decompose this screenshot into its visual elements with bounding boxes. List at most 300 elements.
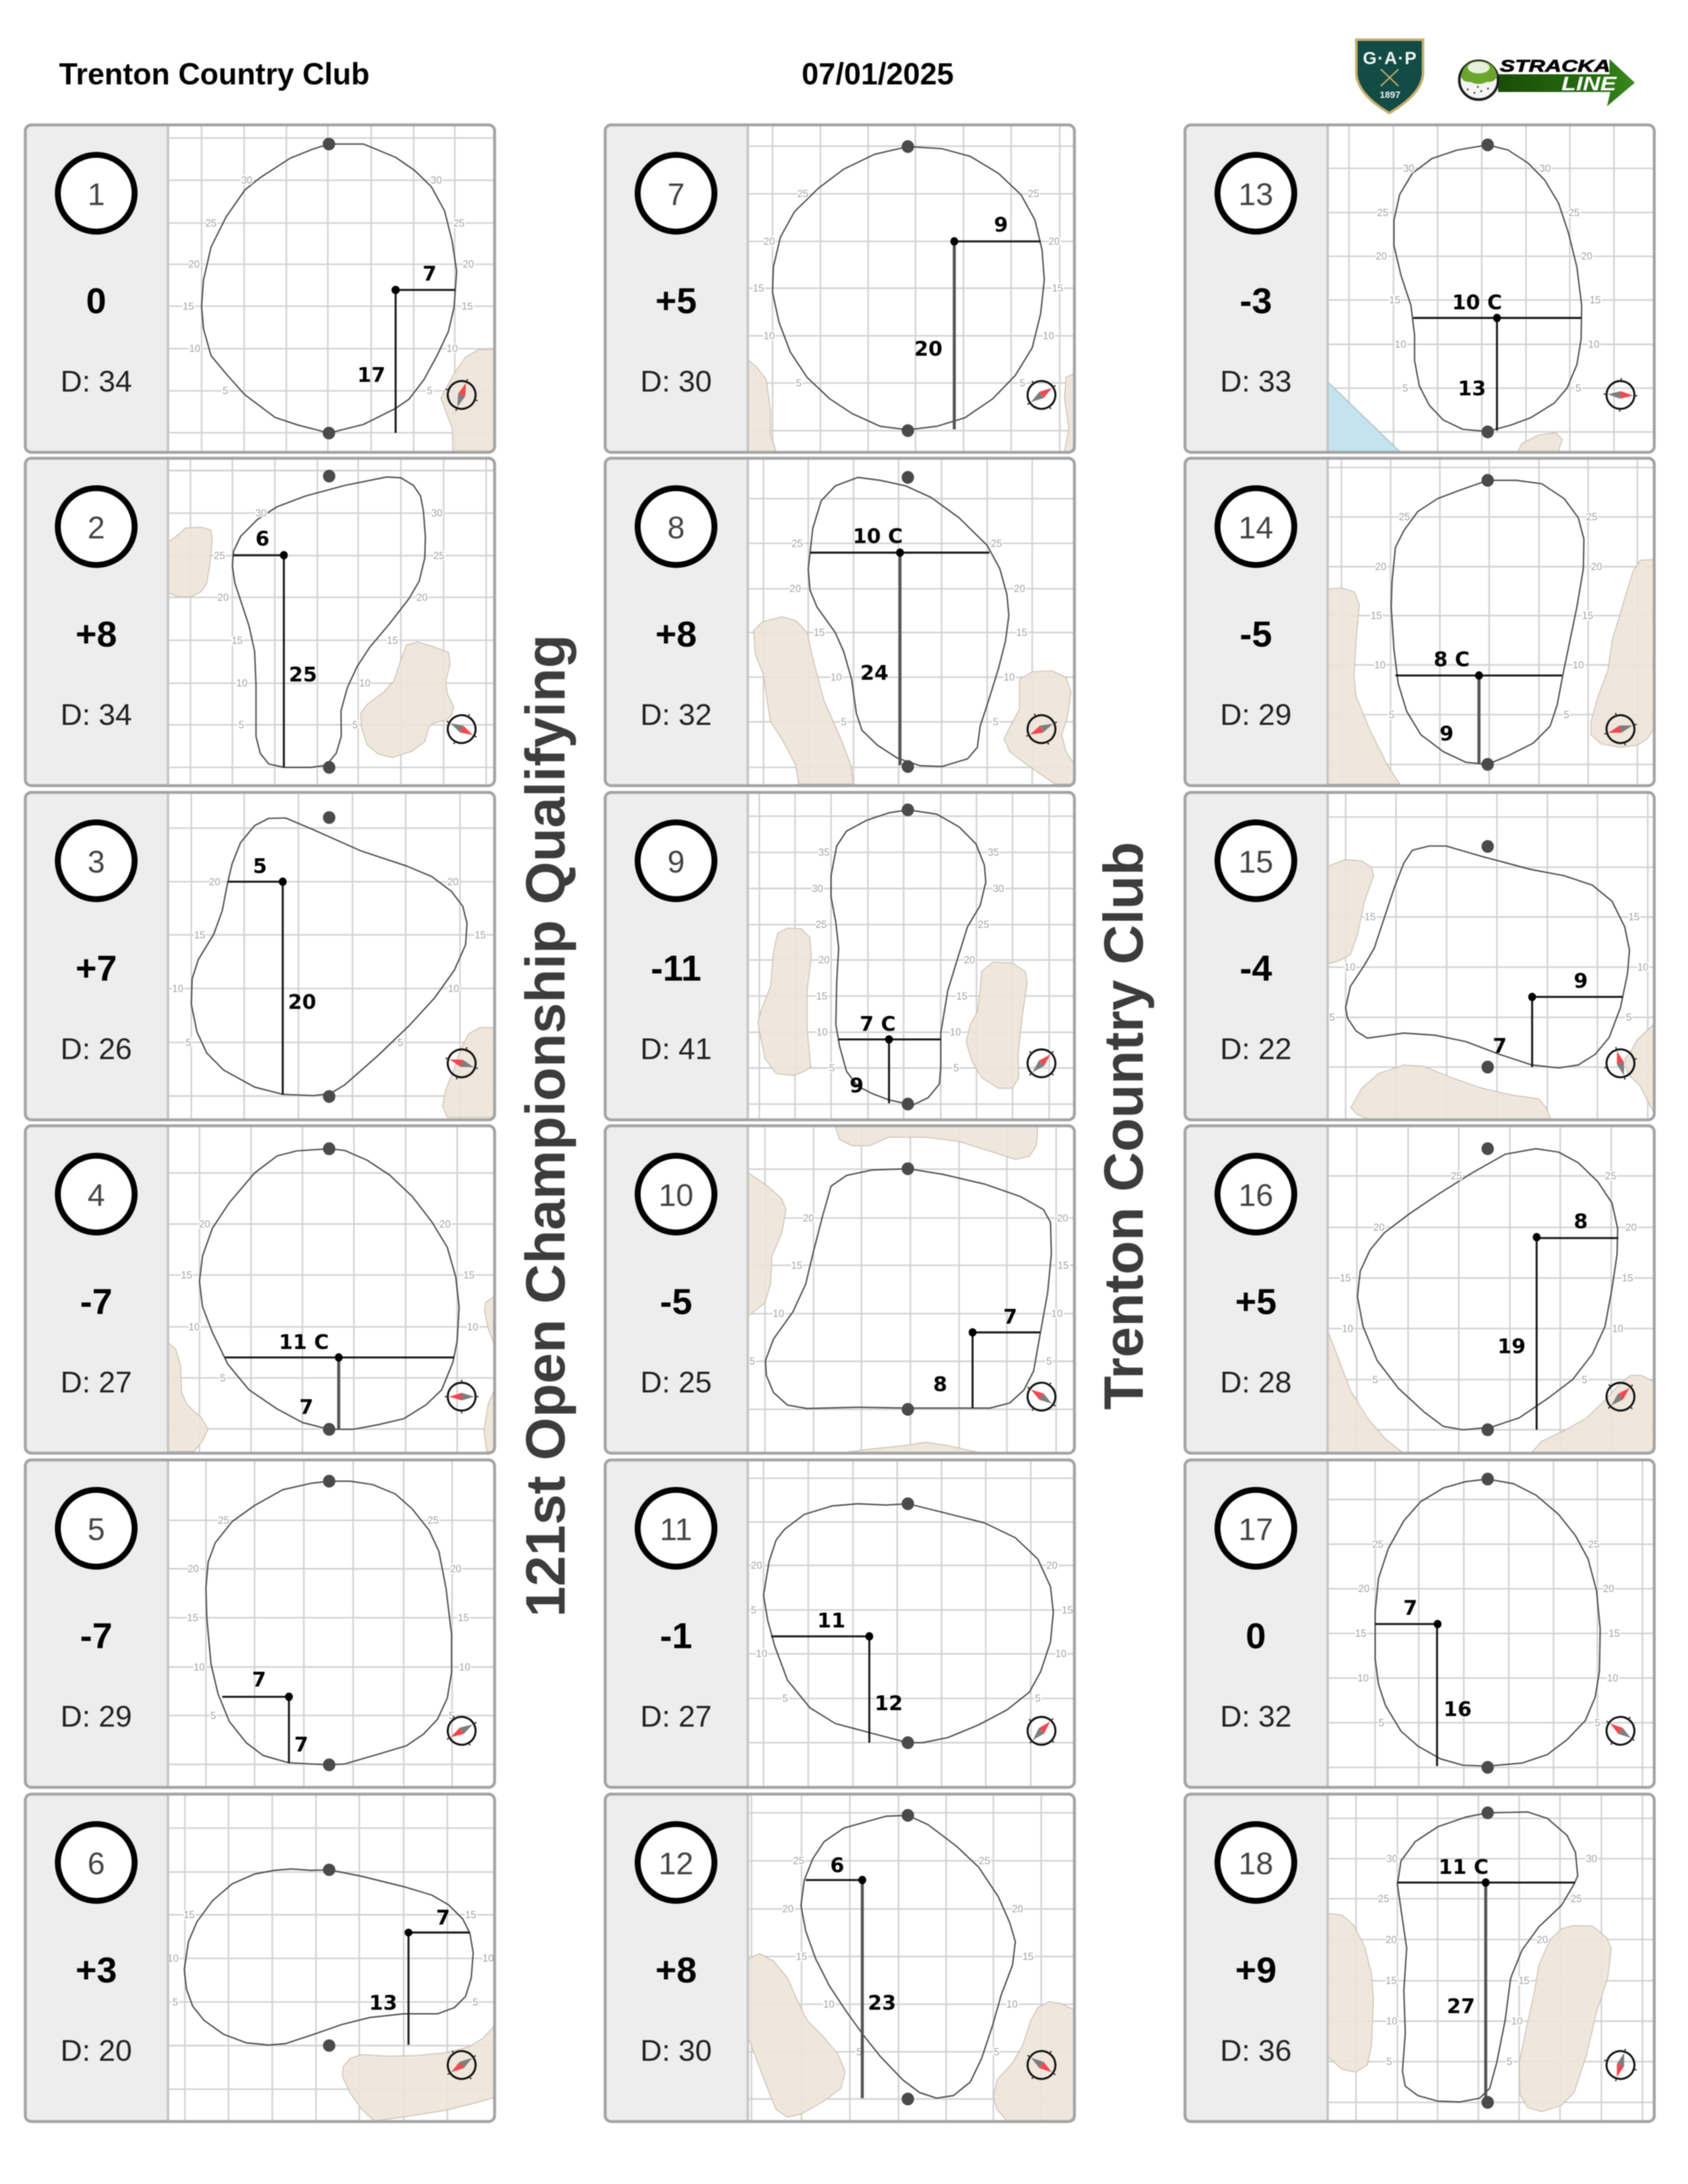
distance markers: 10 [1572,659,1584,671]
distance markers: 15 [1386,1975,1397,1987]
distance markers: 10 [172,982,184,994]
score column hole 3: D: 26 [61,1032,132,1066]
distance markers: 10 [1043,330,1054,342]
distance markers: 25 [1571,1893,1582,1905]
distance markers: 5 [473,1996,479,2008]
pin lines [1398,1883,1575,2099]
distance markers: 5 [1389,709,1395,721]
score column hole 15: 15 [1238,845,1274,879]
score column hole 1: 0 [86,281,106,322]
distance markers: 15 [1582,609,1593,621]
green outline [764,1504,1053,1743]
yardage: 7 C: 7 C [860,1013,895,1036]
distance markers: 15 [796,1950,808,1962]
front and back dots [1481,840,1494,1073]
front and back dots [901,1162,914,1416]
score column hole 2: 2 [88,511,105,545]
front and back dots [322,138,335,440]
logo: Stracka Line: STRACKA [1500,57,1610,76]
score column hole 15: -4 [1240,949,1272,989]
pin lines [408,1933,470,2045]
score column hole 3: 3 [88,845,105,879]
panel: hole 18 [1185,1794,1654,2122]
distance markers: 15 [1022,1950,1034,1962]
distance markers: 5 [841,716,847,727]
score column hole 11: -1 [660,1616,692,1657]
distance markers: 30 [1403,162,1415,174]
sand bunkers [1327,860,1654,1119]
pin lines [838,1040,941,1103]
distance markers: 10 [773,1308,784,1320]
score column hole 6: D: 20 [61,2034,132,2068]
distance markers: 10 [188,1321,200,1333]
distance markers: 20 [450,1563,462,1575]
compass [445,1380,479,1414]
yardage: 8 C: 8 C [1434,648,1469,672]
distance markers: 5 [1594,1716,1600,1728]
distance markers: 10 [236,678,248,689]
distance markers: 15 [956,990,968,1002]
distance markers: 30 [1387,1853,1398,1865]
panel: hole 12 [605,1794,1074,2122]
score column hole 5: -7 [80,1616,112,1657]
distance markers: 20 [782,1903,794,1915]
yardage: 10 C: 10 C [1452,290,1502,314]
score column hole 12 [605,1794,1074,2122]
score column hole 6: 6 [88,1846,105,1881]
score column hole 16 [1185,1126,1654,1453]
pin lines [955,241,1041,430]
distance markers [181,1218,479,1384]
distance markers: 10 [189,343,201,354]
score column hole 9: D: 41 [641,1032,711,1066]
yardage: 10 C: 10 C [852,525,903,549]
green outline [184,1869,473,2045]
distance markers: 10 [823,1998,835,2010]
score column hole 18: D: 36 [1220,2034,1291,2068]
pin [280,551,288,560]
score column hole 10 [605,1126,1074,1453]
distance markers: 15 [816,990,828,1002]
score column hole 4: D: 27 [61,1365,132,1399]
score column hole 13: D: 33 [1220,365,1291,398]
distance markers: 5 [1507,2056,1512,2068]
distance markers: 25 [1451,1170,1463,1181]
green map hole 9 [747,793,1074,1119]
distance markers: 25 [792,538,803,549]
pin lines [806,1880,863,2098]
yardage: 6: 6 [830,1853,844,1877]
distance markers: 5 [782,1693,788,1705]
pin lines [228,882,283,1095]
score column hole 10: D: 25 [641,1365,711,1399]
score column hole 6: +3 [75,1950,117,1991]
panel: hole 1 [25,125,495,452]
score column hole 3 [25,792,495,1120]
yardage: 8: 8 [1574,1210,1588,1234]
yardage: 13: 13 [369,1992,398,2015]
panel: hole 11 [605,1460,1074,1787]
distance markers: 10 [1052,1308,1063,1320]
distance markers [172,876,486,1048]
pin [404,1928,413,1937]
front and back dots [323,470,335,774]
logo: GAP shield: 1897 [1380,90,1400,100]
green outline [1375,1479,1600,1766]
distance markers: 5 [210,1710,216,1722]
panel: hole 15 [1185,792,1654,1120]
compass [1018,1373,1065,1420]
compass [439,1708,484,1754]
vertical title: event name: 121st Open Championship Qualifying [515,635,576,1617]
pin [969,1328,977,1337]
sand bunkers [167,1296,495,1451]
distance markers: 10 [1637,961,1649,973]
front and back dots [323,1143,335,1435]
distance markers: 20 [751,1560,762,1571]
front and back dots [1481,138,1494,438]
score column hole 16: D: 28 [1220,1365,1291,1399]
distance markers [1376,162,1601,394]
distance markers: 5 [1372,1374,1378,1386]
distance markers [1371,511,1603,721]
distance markers: 10 [459,1661,471,1673]
distance markers: 20 [416,592,428,603]
score column hole 2 [25,458,495,786]
panel: hole 2 [25,458,495,786]
sand bunker [441,349,494,451]
distance markers: 5 [239,719,245,731]
score column hole 1 [25,125,495,452]
front and back dots [323,1475,335,1771]
sand bunkers [747,359,1074,451]
compass [438,2041,485,2089]
distance markers: 5 [1035,1693,1041,1705]
panel: hole 16 [1185,1126,1654,1453]
distance markers [790,538,1028,727]
score column hole 4: -7 [80,1282,112,1322]
distance markers: 15 [231,635,243,646]
distance markers [812,846,1004,1073]
score column hole 7: 7 [668,177,684,212]
score column hole 18: 18 [1238,1846,1274,1881]
green outline [192,818,467,1095]
vertical title: club name: Trenton Country Club [1093,841,1155,1410]
score column hole 7 [605,125,1074,452]
pin [865,1632,874,1641]
distance markers: 10 [1004,671,1015,683]
distance markers: 10 [467,1321,479,1333]
distance markers: 10 [1342,1322,1354,1334]
distance markers [187,1515,471,1722]
green outline [202,144,457,433]
score column hole 11: D: 27 [641,1700,711,1733]
distance markers: 25 [1399,511,1410,523]
distance markers: 30 [431,507,443,519]
yardage: 7: 7 [1404,1597,1417,1620]
distance markers: 15 [181,1269,192,1281]
score column hole 11: 11 [660,1512,692,1547]
pin [885,1035,893,1044]
distance markers: 10 [1357,1672,1369,1684]
distance markers: 10 [448,982,459,994]
distance markers: 25 [433,549,445,561]
distance markers: 10 [1607,1672,1619,1684]
front and back dots [901,803,914,1111]
score column hole 2: +8 [75,614,117,655]
score column hole 6 [25,1794,495,2122]
pin [1533,1233,1540,1241]
distance markers: 5 [1576,382,1582,394]
score column hole 16: 16 [1238,1178,1274,1213]
compass [1018,1707,1065,1754]
score column hole 14: -5 [1240,614,1272,655]
score column hole 4 [25,1126,495,1453]
yardage: 20: 20 [914,338,943,361]
panel: hole 10 [605,1126,1074,1453]
green map hole 1 [169,126,495,452]
distance markers: 20 [1048,235,1060,247]
score column hole 5 [25,1460,495,1787]
yardage: 24: 24 [860,662,889,685]
distance markers: 25 [815,919,827,931]
score column hole 18 [1185,1794,1654,2122]
distance markers: 15 [1355,1628,1366,1640]
front and back dots [323,1863,335,2052]
distance markers: 5 [398,1036,403,1048]
compass [1019,706,1064,752]
distance markers: 15 [465,1909,477,1921]
distance markers: 25 [1568,207,1580,219]
sand bunkers [754,617,1074,784]
distance markers: 15 [1365,911,1376,923]
distance markers: 10 [446,343,458,354]
yardage: 20: 20 [288,991,316,1014]
score column hole 3: +7 [75,949,117,989]
green map hole 12 [747,1796,1074,2121]
distance markers: 5 [220,1372,226,1384]
front and back dots [901,1497,914,1749]
distance markers [1355,1538,1620,1728]
distance markers: 10 [1055,1648,1067,1660]
score column hole 2: D: 34 [61,698,132,732]
compass [439,706,484,752]
distance markers [749,1212,1069,1367]
front and back dots [1481,1473,1494,1774]
pin lines [810,553,989,765]
sand bunker [343,2026,495,2121]
distance markers: 15 [1062,1604,1074,1616]
distance markers: 25 [453,217,465,229]
yardage: 7: 7 [1493,1035,1507,1058]
distance markers: 15 [463,1269,475,1281]
pin lines [1395,675,1562,764]
pin [392,286,400,295]
distance markers [167,1909,494,2008]
title: date: 07/01/2025 [802,57,954,91]
green outline [1398,1812,1577,2102]
distance markers: 5 [1582,1374,1588,1386]
green outline [232,477,425,767]
distance markers: 30 [1539,162,1551,174]
distance markers: 5 [427,385,433,397]
score column hole 5: 5 [88,1512,105,1547]
front and back dots [901,140,914,437]
compass [1018,2041,1065,2089]
pin lines [771,1636,869,1743]
pin [335,1354,343,1362]
green outline [801,1815,1015,2098]
distance markers: 15 [1622,1272,1633,1284]
distance markers: 20 [188,258,200,270]
distance markers: 10 [816,1026,828,1038]
yardage: 7 from front: 7 [295,1733,308,1757]
pin lines [222,1697,289,1763]
green map hole 8 [747,459,1074,785]
score column hole 5: D: 29 [61,1700,132,1733]
distance markers: 5 [186,1036,192,1048]
score column hole 9: 9 [668,845,684,879]
green map hole 11 [747,1462,1074,1787]
distance markers: 20 [218,592,229,603]
green map hole 5 [167,1461,495,1787]
green map hole 13 [1327,126,1654,451]
distance markers: 20 [1591,560,1603,572]
sand bunkers [747,1127,1038,1452]
distance markers: 20 [1375,560,1387,572]
distance markers: 25 [1028,188,1040,200]
sand bunkers [1327,560,1654,784]
distance markers: 5 [1564,709,1570,721]
compass [1597,1373,1644,1420]
distance markers: 30 [812,883,824,895]
compass [1599,708,1642,750]
panel: hole 9 [605,792,1074,1120]
front and back dots [1481,474,1494,770]
distance markers: 30 [241,175,252,187]
panel: hole 3 [25,792,495,1120]
score column hole 11 [605,1460,1074,1787]
score column hole 14: D: 29 [1220,698,1291,732]
distance markers: 20 [1603,1583,1615,1595]
distance markers: 15 [1628,911,1640,923]
score column hole 12: D: 30 [641,2034,711,2068]
distance markers [753,188,1063,389]
distance markers: 15 [1609,1628,1620,1640]
score column hole 17: 17 [1238,1512,1274,1547]
green map hole 4 [167,1127,495,1452]
distance markers: 10 [1612,1322,1624,1334]
score column hole 7: +5 [655,281,697,322]
panel: hole 14 [1185,458,1654,786]
score column hole 8: +8 [655,614,697,655]
green outline [199,1149,459,1430]
panel: hole 5 [25,1460,495,1787]
distance markers: 5 [1387,2056,1393,2068]
yardage: 12: 12 [874,1691,903,1715]
score column hole 8 [605,458,1074,786]
score column hole 17 [1185,1460,1654,1787]
distance markers: 20 [1386,1933,1397,1945]
distance markers: 25 [205,217,217,229]
distance markers: 10 [1395,338,1406,350]
distance markers: 20 [463,258,474,270]
score column hole 12: 12 [658,1846,694,1881]
yardage: 17: 17 [357,363,386,387]
yardage: 9: 9 [850,1073,863,1097]
compass [441,1042,483,1084]
distance markers: 20 [1626,1221,1637,1233]
distance markers: 20 [1047,1560,1058,1571]
pin [1482,1879,1490,1887]
green map hole 7 [747,126,1074,451]
pin [1434,1619,1442,1629]
sand bunkers [747,1954,1074,2121]
yardage: 7: 7 [1004,1305,1017,1328]
sand bunkers [167,527,454,758]
distance markers: 5 [1329,1012,1335,1024]
distance markers: 20 [1057,1212,1069,1224]
distance markers: 20 [209,876,220,888]
distance markers: 10 [1588,338,1599,350]
distance markers: 20 [1012,1903,1024,1915]
pin lines [1413,318,1582,430]
distance markers: 20 [187,1563,199,1575]
sand bunkers [758,928,1027,1089]
distance markers: 15 [1016,627,1028,639]
distance markers: 10 [167,1953,179,1965]
distance markers: 5 [1626,1012,1632,1024]
pin [896,549,904,557]
distance markers: 20 [964,954,976,966]
distance markers: 10 [1386,2015,1398,2027]
pin lines [972,1333,1040,1408]
distance markers: 25 [1372,1538,1384,1550]
pin lines [1537,1238,1618,1430]
distance markers: 25 [978,919,989,931]
distance markers: 15 [462,300,473,312]
distance markers [751,1560,1074,1705]
score column hole 7: D: 30 [641,365,711,398]
sand bunkers [1327,1327,1654,1452]
score column hole 16: +5 [1235,1282,1277,1322]
green map hole 15 [1327,793,1654,1119]
distance markers: 10 [193,1661,205,1673]
distance markers: 30 [1586,1853,1598,1865]
distance markers: 15 [194,929,206,941]
distance markers: 5 [751,1604,757,1616]
green map hole 18 [1327,1796,1654,2121]
distance markers: 15 [1518,1975,1530,1987]
yardage: 25: 25 [289,663,317,687]
pin [858,1876,866,1884]
front and back dots [901,471,914,773]
score column hole 15 [1185,792,1654,1120]
green outline [772,147,1044,430]
distance markers: 5 [1403,382,1409,394]
distance markers: 25 [1377,207,1388,219]
pin [950,237,958,246]
distance markers: 5 [993,2046,999,2057]
distance markers: 10 [950,1026,961,1038]
distance markers: 20 [1537,1933,1548,1945]
score column hole 18: +9 [1235,1950,1277,1991]
distance markers [782,1855,1034,2057]
pin lines [1532,997,1623,1067]
distance markers: 30 [256,507,267,519]
green outline [809,478,1009,766]
yardage: 11: 11 [817,1608,846,1632]
